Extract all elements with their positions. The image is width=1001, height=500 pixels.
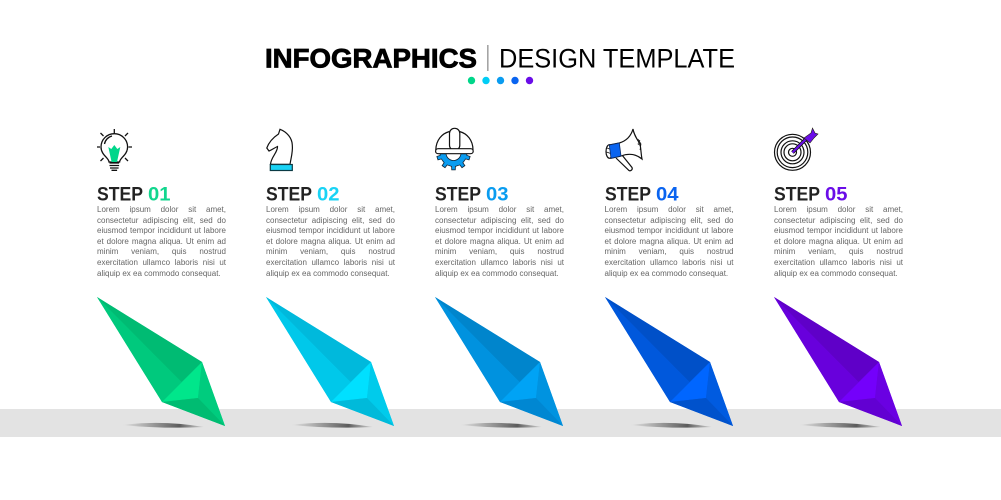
heading: step 03	[435, 184, 509, 206]
heading: step 05: STEP	[774, 184, 820, 206]
text block: exercitation ullamco laboris nisi ut	[435, 258, 564, 267]
text block	[435, 205, 564, 278]
heading: step 02	[266, 184, 340, 206]
text block: Lorem ipsum dolor sit amet,	[435, 205, 564, 214]
text block: minim veniam, quis nostrud	[435, 247, 564, 256]
text block: aliquip ex ea commodo consequat.	[604, 269, 728, 278]
text block: aliquip ex ea commodo consequat.	[435, 269, 559, 278]
text block: consectetur adipiscing elit, sed do	[604, 216, 734, 225]
step 4 panel	[604, 128, 734, 428]
heading: step 05	[774, 184, 848, 206]
text block: Lorem ipsum dolor sit amet,	[266, 205, 395, 214]
text block: et dolore magna aliqua. Ut enim ad	[774, 237, 903, 246]
text block: eiusmod tempor incididunt ut labore	[266, 226, 395, 235]
text block: consectetur adipiscing elit, sed do	[774, 216, 903, 225]
step 3 panel	[435, 128, 564, 428]
heading: step 04: STEP	[604, 184, 650, 206]
heading: step 04: 04	[656, 184, 678, 206]
heading: step 03: 03	[486, 184, 509, 206]
heading: step 02: 02	[317, 184, 340, 206]
text block: minim veniam, quis nostrud	[266, 247, 395, 256]
text block: exercitation ullamco laboris nisi ut	[266, 258, 395, 267]
title dots	[468, 76, 534, 84]
heading: step 03: STEP	[435, 184, 481, 206]
text block: minim veniam, quis nostrud	[774, 247, 903, 256]
text block: eiusmod tempor incididunt ut labore	[97, 226, 226, 235]
step 2 panel	[266, 128, 395, 428]
text block: consectetur adipiscing elit, sed do	[435, 216, 564, 225]
title: INFOGRAPHICS	[265, 44, 477, 74]
crystal: blue	[605, 297, 733, 428]
title	[265, 44, 735, 74]
text block: aliquip ex ea commodo consequat.	[266, 269, 390, 278]
icon: megaphone	[605, 128, 643, 172]
text block: eiusmod tempor incididunt ut labore	[774, 226, 903, 235]
heading: step 04	[604, 184, 678, 206]
floor band	[0, 409, 1001, 437]
heading: step 05: 05	[825, 184, 848, 206]
text block: exercitation ullamco laboris nisi ut	[604, 258, 734, 267]
crystal: purple	[774, 297, 902, 428]
text block: exercitation ullamco laboris nisi ut	[774, 258, 903, 267]
text block	[604, 205, 734, 278]
text block: minim veniam, quis nostrud	[97, 247, 226, 256]
text block	[774, 205, 903, 278]
step 1 panel	[97, 129, 226, 428]
text block: eiusmod tempor incididunt ut labore	[435, 226, 564, 235]
text block: Lorem ipsum dolor sit amet,	[97, 205, 226, 214]
text block: aliquip ex ea commodo consequat.	[774, 269, 898, 278]
text block: eiusmod tempor incididunt ut labore	[604, 226, 734, 235]
text block: minim veniam, quis nostrud	[604, 247, 734, 256]
heading: step 01: STEP	[97, 184, 143, 206]
title: DESIGN TEMPLATE	[499, 44, 735, 74]
text block: et dolore magna aliqua. Ut enim ad	[97, 237, 226, 246]
icon: target and arrow	[774, 127, 818, 171]
heading: step 01: 01	[148, 184, 171, 206]
text block: exercitation ullamco laboris nisi ut	[97, 258, 226, 267]
text block	[97, 205, 226, 278]
text block: aliquip ex ea commodo consequat.	[97, 269, 221, 278]
text block: et dolore magna aliqua. Ut enim ad	[266, 237, 395, 246]
text block: consectetur adipiscing elit, sed do	[266, 216, 395, 225]
icon: helmet and gear	[435, 128, 474, 170]
icon: chess knight	[266, 128, 293, 172]
crystal: cyan	[266, 297, 394, 428]
heading: step 01	[97, 184, 171, 206]
text block: et dolore magna aliqua. Ut enim ad	[435, 237, 564, 246]
text block: et dolore magna aliqua. Ut enim ad	[604, 237, 734, 246]
text block	[266, 205, 395, 278]
text block: Lorem ipsum dolor sit amet,	[774, 205, 903, 214]
text block: Lorem ipsum dolor sit amet,	[604, 205, 734, 214]
text block: consectetur adipiscing elit, sed do	[97, 216, 226, 225]
crystal: green	[97, 297, 225, 428]
crystal: sky blue	[435, 297, 563, 428]
icon: light bulb	[97, 129, 132, 171]
step 5 panel	[774, 127, 903, 428]
heading: step 02: STEP	[266, 184, 312, 206]
